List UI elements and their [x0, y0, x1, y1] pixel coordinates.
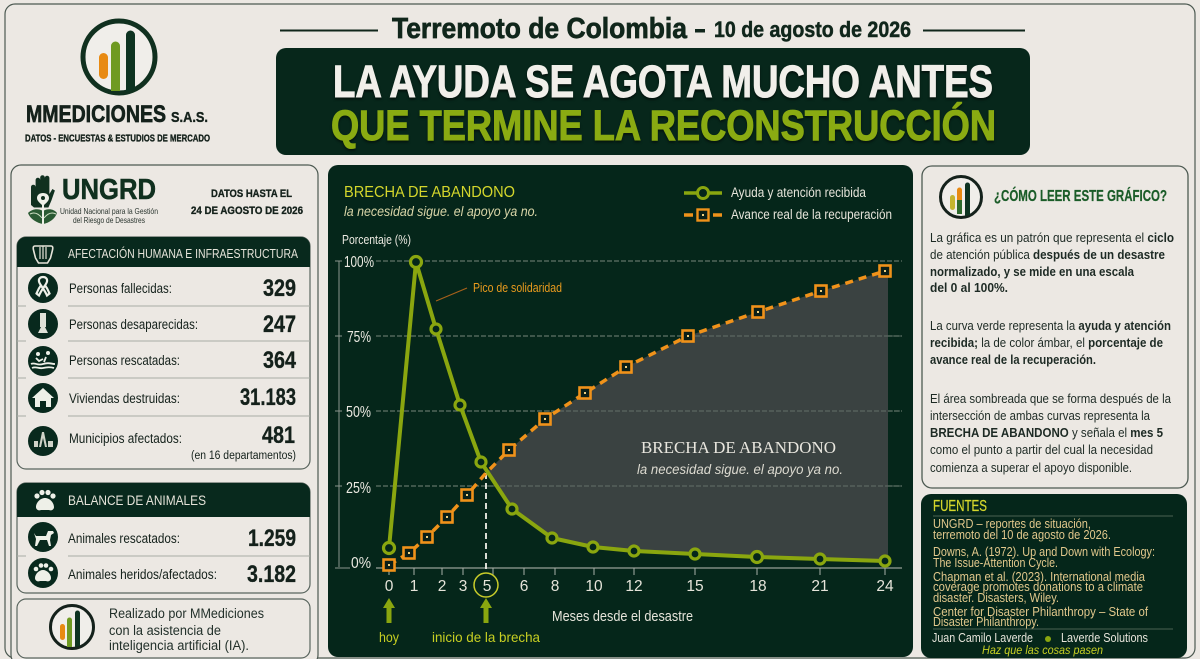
headline line 1: LA AYUDA SE AGOTA MUCHO ANTES	[333, 56, 993, 107]
explanation paragraph 3: El área sombreada que se forma después de la	[930, 392, 1171, 406]
source list: Center for Disaster Philanthropy – State of	[933, 605, 1148, 619]
y axis labels: 100%	[344, 254, 374, 271]
explanation paragraph 2	[930, 319, 1171, 367]
shaded area label: la necesidad sigue. el apoyo ya no.	[637, 462, 843, 477]
explanation paragraph 3: BRECHA DE ABANDONO y señala el mes 5	[930, 426, 1163, 440]
UNGRD wordmark: del Riesgo de Desastres	[73, 215, 145, 225]
panel: left data column	[11, 165, 318, 659]
x axis labels: 12	[625, 578, 643, 595]
row: municipios: Municipios afectados:	[69, 431, 182, 446]
panel: human impact	[17, 237, 310, 469]
headline line 2: QUE TERMINE LA RECONSTRUCCIÓN	[331, 101, 996, 150]
sources heading: FUENTES	[933, 498, 987, 515]
legend	[684, 185, 892, 222]
y axis labels: 25%	[346, 480, 371, 497]
x axis labels: 6	[520, 578, 528, 595]
shaded gap area	[486, 271, 888, 561]
y axis labels: 50%	[346, 404, 371, 421]
y axis labels: 0%	[351, 555, 371, 572]
explanation paragraph 2: La curva verde representa la ayuda y atención	[930, 319, 1171, 333]
y axis labels	[344, 254, 374, 572]
row: municipios: 481	[262, 422, 295, 449]
month 5 highlight ring	[474, 573, 498, 597]
legend: Ayuda y atención recibida	[731, 185, 866, 200]
row: viviendas	[28, 383, 296, 413]
arrow: inicio de la brecha: inicio de la brecha	[432, 629, 540, 645]
row: rescatadas: 364	[263, 347, 297, 374]
explanation paragraph 2: avance real de la recuperación.	[930, 353, 1096, 367]
x axis labels: 1	[410, 578, 418, 595]
author signature	[932, 630, 1148, 657]
row: desaparecidas: Personas desaparecidas:	[69, 317, 198, 332]
x axis labels	[385, 578, 894, 595]
arrow: hoy: hoy	[379, 629, 399, 645]
panel heading: BALANCE DE ANIMALES	[68, 493, 206, 508]
peak annotation	[436, 281, 562, 301]
source list: UNGRD – reportes de situación,	[933, 517, 1091, 531]
row: viviendas: 31.183	[240, 384, 296, 411]
brand tagline: DATOS - ENCUESTAS & ESTUDIOS DE MERCADO	[25, 134, 210, 144]
data date note: DATOS HASTA EL	[211, 188, 292, 200]
credit text: inteligencia artificial (IA).	[109, 638, 249, 653]
explanation paragraph 1	[930, 231, 1174, 295]
chart title: BRECHA DE ABANDONO	[344, 184, 515, 201]
row: fallecidas: 329	[263, 275, 296, 302]
row: animales rescatados	[28, 522, 296, 552]
row: municipios	[28, 422, 296, 462]
x axis labels: 15	[686, 578, 704, 595]
y axis title: Porcentaje (%)	[342, 233, 411, 247]
panel heading	[17, 237, 310, 267]
x axis ticks	[389, 568, 885, 575]
icon: small logo	[50, 606, 94, 648]
panel: animals	[17, 483, 310, 593]
x axis labels: 3	[459, 578, 467, 595]
source list	[933, 517, 1155, 629]
row: animales rescatados: Animales rescatados:	[68, 531, 180, 546]
row: fallecidas: Personas fallecidas:	[69, 281, 172, 296]
brand name: S.A.S.	[171, 109, 208, 126]
source list: coverage promotes donations to a climate	[933, 580, 1143, 594]
source list: terremoto del 10 de agosto de 2026.	[933, 528, 1111, 542]
brand name: MMEDICIONES	[26, 101, 166, 128]
row: desaparecidas	[28, 309, 296, 339]
credit text: Realizado por MMediciones	[109, 606, 264, 621]
credit text	[109, 606, 264, 653]
row: fallecidas	[28, 273, 296, 303]
data date note	[191, 188, 303, 217]
panel heading	[17, 483, 310, 517]
row: animales heridos	[28, 558, 296, 588]
row: animales rescatados: 1.259	[248, 525, 296, 552]
headline banner	[276, 48, 1030, 155]
row: animales heridos: 3.182	[247, 561, 296, 588]
credit text: con la asistencia de	[109, 623, 221, 638]
explanation paragraph 3	[930, 392, 1171, 475]
shaded area label	[637, 438, 843, 477]
source list: disaster. Disasters, Wiley.	[933, 591, 1059, 605]
x axis labels: 2	[438, 578, 446, 595]
source list: Chapman et al. (2023). International media	[933, 570, 1145, 584]
legend: Avance real de la recuperación	[731, 207, 892, 222]
icon: MMediciones logo	[83, 21, 155, 93]
panel: authorship note	[17, 599, 310, 658]
icon: logo	[940, 176, 982, 218]
source list: Downs, A. (1972). Up and Down with Ecology:	[933, 545, 1155, 559]
panel: chart	[328, 165, 913, 657]
title line	[280, 13, 1025, 45]
row: animales heridos: Animales heridos/afectados:	[68, 567, 217, 582]
x axis labels: 18	[749, 578, 767, 595]
series: aid and attention	[384, 256, 890, 566]
source list: Disaster Philanthropy.	[933, 615, 1039, 629]
y axis labels: 75%	[347, 329, 371, 346]
UNGRD wordmark: Unidad Nacional para la Gestión	[60, 206, 158, 216]
panel: how to read	[922, 166, 1188, 488]
title line: Terremoto de Colombia	[392, 13, 688, 45]
series: recovery progress	[384, 266, 890, 570]
line chart	[335, 233, 902, 645]
x axis labels: 24	[876, 578, 894, 595]
explanation paragraph 3: como el punto a partir del cual la necesidad	[930, 443, 1153, 457]
intersection dashed marker	[485, 473, 487, 572]
row: municipios: (en 16 departamentos)	[191, 450, 296, 462]
panel heading: AFECTACIÓN HUMANA E INFRAESTRUCTURA	[68, 246, 298, 261]
x axis labels: 8	[551, 578, 559, 595]
UNGRD wordmark: UNGRD	[62, 174, 156, 206]
explanation paragraph 1: del 0 al 100%.	[930, 281, 1008, 295]
x axis title: Meses desde el desastre	[552, 609, 693, 625]
source list: The Issue-Attention Cycle.	[933, 556, 1058, 570]
explanation paragraph 1: La gráfica es un patrón que representa el ciclo	[930, 231, 1174, 245]
author signature: Haz que las cosas pasen	[982, 643, 1103, 657]
title line: 10 de agosto de 2026	[714, 17, 911, 42]
explanation paragraph 1: normalizado, y se mide en una escala	[930, 265, 1135, 279]
author signature: Juan Camilo Laverde	[932, 630, 1033, 645]
explanation paragraph 3: intersección de ambas curvas representa la	[930, 409, 1150, 423]
explanation paragraph 2: recibida; la de color ámbar, el porcentaje de	[930, 336, 1163, 350]
arrow: hoy	[379, 598, 399, 645]
UNGRD wordmark	[60, 174, 158, 225]
x axis labels: 0	[385, 578, 394, 595]
explanation paragraph 3: comienza a superar el apoyo disponible.	[930, 461, 1132, 475]
peak annotation: Pico de solidaridad	[473, 281, 562, 295]
arrow: inicio de la brecha	[432, 598, 540, 645]
x axis labels: 5	[483, 578, 491, 595]
row: desaparecidas: 247	[263, 311, 296, 338]
icon: UNGRD hand logo	[28, 175, 57, 224]
x axis labels: 21	[811, 578, 829, 595]
row: viviendas: Viviendas destruidas:	[69, 391, 180, 406]
row: rescatadas: Personas rescatadas:	[69, 353, 180, 368]
explanation paragraph 1: de atención pública después de un desastre	[930, 248, 1165, 262]
panel: sources	[921, 494, 1187, 658]
brand block: MMediciones	[25, 21, 210, 144]
chart subtitle: la necesidad sigue. el apoyo ya no.	[344, 204, 538, 219]
shaded area label: BRECHA DE ABANDONO	[641, 438, 836, 457]
x axis labels: 10	[585, 578, 603, 595]
author signature: Laverde Solutions	[1061, 630, 1148, 645]
row: rescatadas	[28, 346, 297, 376]
data date note: 24 DE AGOSTO DE 2026	[191, 205, 303, 217]
